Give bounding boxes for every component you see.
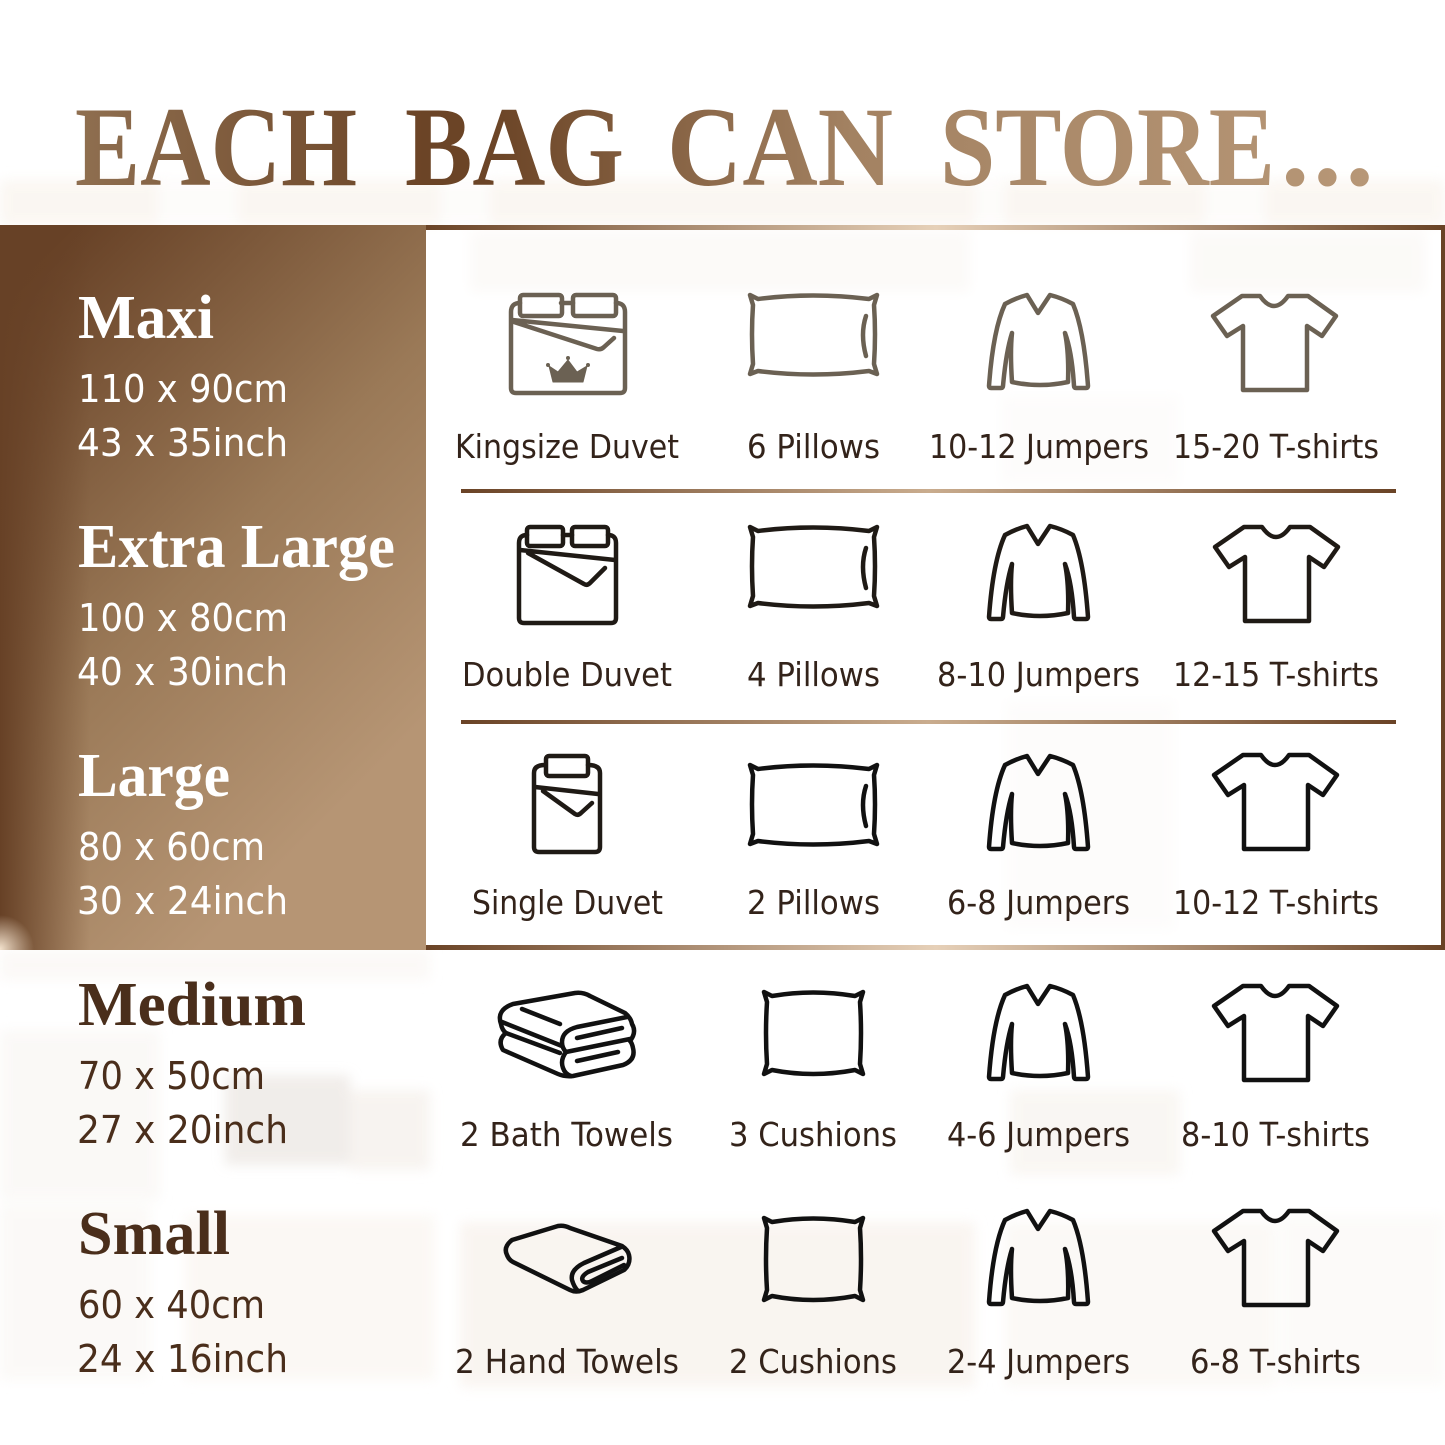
label: 6-8 Jumpers xyxy=(947,884,1130,922)
row: Medium contents xyxy=(460,986,1370,1154)
icon: pillow xyxy=(750,295,877,374)
icon: cushion xyxy=(764,1218,863,1300)
label: 2 Hand Towels xyxy=(455,1343,679,1381)
size: Extra Large: 40 x 30inch xyxy=(77,650,288,694)
label: Single Duvet xyxy=(472,884,663,922)
icon: t-shirt xyxy=(1215,527,1338,621)
row: Extra Large contents xyxy=(462,526,1379,694)
label: 15-20 T-shirts xyxy=(1173,428,1379,466)
title: ... xyxy=(1281,85,1378,210)
size: Small xyxy=(77,1200,288,1381)
title: CAN xyxy=(667,85,893,210)
size: Large: Large xyxy=(78,742,230,810)
size: Maxi: 110 x 90cm xyxy=(78,367,288,411)
icon: pillow xyxy=(750,527,877,606)
size: Small: 24 x 16inch xyxy=(77,1337,288,1381)
label: 8-10 Jumpers xyxy=(937,656,1140,694)
icon: jumper xyxy=(989,756,1088,849)
size: Extra Large: Extra Large xyxy=(78,513,395,581)
title: BAG xyxy=(405,85,624,210)
size: Small: Small xyxy=(78,1200,230,1268)
icon: kingsize duvet xyxy=(511,295,625,393)
icon: single duvet xyxy=(534,756,600,852)
size: Extra Large xyxy=(77,513,395,694)
size: Medium: Medium xyxy=(78,971,306,1039)
icon: jumper xyxy=(989,295,1088,388)
icon: folded hand towel xyxy=(506,1226,629,1292)
label: Kingsize Duvet xyxy=(455,428,679,466)
size: Maxi: Maxi xyxy=(78,284,214,352)
label: 4-6 Jumpers xyxy=(947,1116,1130,1154)
row: Large contents xyxy=(472,755,1379,922)
row: Maxi contents xyxy=(455,295,1379,466)
icon: double duvet xyxy=(519,527,616,623)
size: Extra Large: 100 x 80cm xyxy=(78,596,288,640)
size: Medium: 70 x 50cm xyxy=(78,1054,265,1098)
icon: jumper xyxy=(989,986,1088,1079)
title xyxy=(75,85,1378,210)
size: Large: 30 x 24inch xyxy=(77,879,288,923)
label: 2 Cushions xyxy=(729,1343,897,1381)
label: 12-15 T-shirts xyxy=(1173,656,1379,694)
icon: t-shirt xyxy=(1214,1211,1337,1305)
label: 2-4 Jumpers xyxy=(947,1343,1130,1381)
label: 10-12 Jumpers xyxy=(929,428,1149,466)
size: Small: 60 x 40cm xyxy=(78,1283,265,1327)
label: 4 Pillows xyxy=(747,656,880,694)
size: Large xyxy=(77,742,288,923)
size: Medium xyxy=(77,971,306,1152)
size: Large: 80 x 60cm xyxy=(78,825,265,869)
title: EACH xyxy=(75,85,357,210)
label: 3 Cushions xyxy=(729,1116,897,1154)
label: 6 Pillows xyxy=(747,428,880,466)
label: 6-8 T-shirts xyxy=(1190,1343,1361,1381)
title: STORE xyxy=(940,85,1275,210)
icon: jumper xyxy=(989,1211,1088,1304)
row: Small contents xyxy=(455,1211,1361,1381)
icon: t-shirt xyxy=(1213,296,1336,390)
icon: t-shirt xyxy=(1214,986,1337,1080)
label: 2 Bath Towels xyxy=(460,1116,673,1154)
label: 8-10 T-shirts xyxy=(1181,1116,1370,1154)
icon: cushion xyxy=(764,992,863,1074)
icon: pillow xyxy=(750,765,877,844)
panel: highlighted size rows xyxy=(0,225,1445,950)
size: Medium: 27 x 20inch xyxy=(77,1108,288,1152)
icon: jumper xyxy=(989,526,1088,619)
size: Maxi xyxy=(77,284,288,465)
label: 2 Pillows xyxy=(747,884,880,922)
size: Maxi: 43 x 35inch xyxy=(77,421,288,465)
icon: t-shirt xyxy=(1214,755,1337,849)
icon: stacked bath towels xyxy=(500,993,634,1076)
label: 10-12 T-shirts xyxy=(1173,884,1379,922)
label: Double Duvet xyxy=(462,656,672,694)
